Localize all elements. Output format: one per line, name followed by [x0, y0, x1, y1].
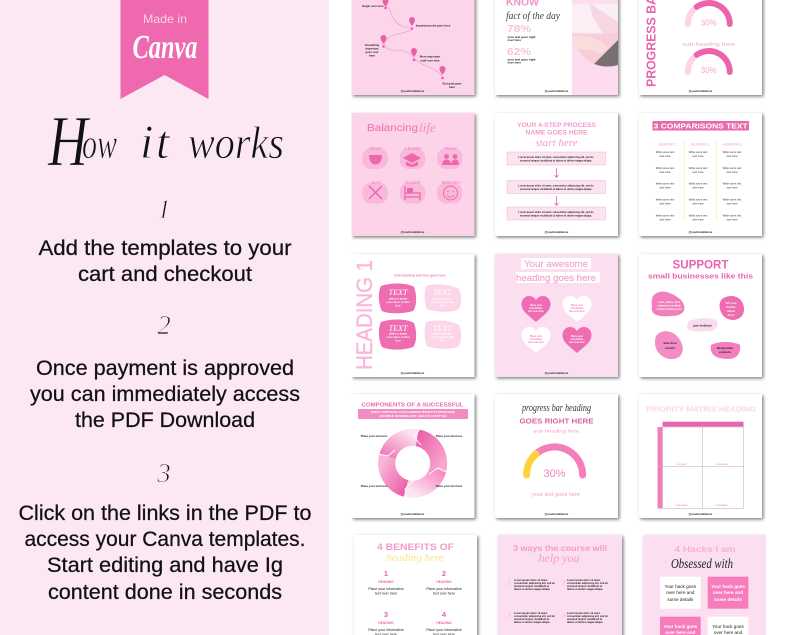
card: support small businesses [639, 254, 762, 377]
card: 4 hacks: over here and [714, 630, 743, 635]
card: 3 ways: consectetur adipiscing elit, sed do [514, 615, 555, 618]
card: heading 1: over here in this [386, 300, 410, 304]
card: 4 hacks: over here and [713, 590, 743, 595]
card: 4 benefits: Place your informative [426, 587, 462, 591]
step 3 text: content done in seconds [48, 580, 282, 604]
card: heading 1 [352, 254, 474, 377]
card: support small businesses: SUPPORT [672, 260, 728, 272]
card: roadmap [352, 0, 474, 95]
card: priority matrix: PRIORITY MATRIX HEADING [646, 404, 756, 414]
card: 4-step process: Lorem ipsum dolor sit amet, consectetur adipiscing elit, sed do [518, 184, 594, 188]
card: 3 ways: eiusmod tempor incididunt ut [567, 585, 602, 588]
card: 3 comparisons: over here [659, 170, 671, 174]
card: heading 1: place a point [389, 296, 407, 300]
card: 4 benefits [354, 535, 477, 635]
title: how it works: it [140, 116, 171, 169]
card: 3 comparisons: over here [726, 170, 738, 174]
card: progress bar heading: 30% [543, 468, 566, 480]
card: roadmap: Something [365, 43, 380, 47]
title: how it works: H [47, 101, 91, 181]
card: support small businesses: products [719, 350, 731, 354]
card: heading 1: over here in this [431, 335, 454, 339]
card: 3 ways: labore et dolore magna aliqua. [514, 588, 550, 591]
card: balancing life: SLEEP [405, 180, 421, 186]
gauge 2 [688, 51, 730, 72]
step 1 text: cart and checkout [78, 262, 252, 286]
card: hearts: informative [530, 338, 543, 341]
card: hearts: Place your [571, 304, 583, 307]
card: balancing life: Balancing [367, 122, 418, 134]
matrix [658, 422, 744, 508]
card: roadmap: Begin over here [362, 4, 384, 8]
card: support small businesses: about [727, 309, 735, 313]
card: balancing life [352, 113, 474, 236]
card: 3 ways: Lorem ipsum dolor sit amet, [514, 579, 548, 582]
card: 4 hacks: Your hack goes [665, 584, 697, 589]
card: hearts: Your awesome [524, 259, 588, 270]
card: support small businesses: friends [726, 305, 736, 309]
card: support small businesses: give feedback [693, 324, 712, 328]
card: 3 comparisons: Write some text [656, 198, 675, 202]
card: 4-step process: start here [535, 137, 578, 149]
matrix: SCHEDULE [716, 464, 728, 466]
card: 4 benefits: Place your informative [368, 587, 404, 591]
card: hearts: informative [530, 307, 543, 310]
card: hearts: heading goes here [516, 273, 596, 284]
card: 3 comparisons: over here [726, 154, 738, 158]
card: 3 ways: 3 [507, 613, 511, 620]
card: priority matrix: @yourhandlehere [689, 512, 713, 516]
icons [369, 153, 459, 200]
card: 4 benefits: HEADING [436, 580, 452, 584]
card: 4-step process: NAME GOES HERE [526, 130, 588, 136]
card: 3 comparisons: HEADING 3 [723, 142, 742, 146]
card: balancing life: @yourhandlehere [401, 230, 425, 234]
card: hearts [495, 254, 618, 377]
card: fact of the day: 78% [507, 23, 532, 35]
card: hearts: Place your [530, 304, 542, 307]
card: roadmap: important [366, 46, 379, 50]
card: 3 comparisons: over here [659, 154, 671, 158]
card: heading 1: place a point [433, 332, 452, 336]
step 3 number: 3 [156, 458, 171, 488]
card: 3 comparisons: HEADING 2 [691, 142, 709, 146]
card: 3 comparisons: Write some text [723, 150, 742, 154]
badge: made in Canva ribbon [120, 0, 208, 99]
card: 3 ways: labore et dolore magna aliqua. [514, 621, 550, 624]
card: 4 hacks: some details [714, 597, 742, 602]
card: 4 hacks: some details [667, 597, 694, 602]
card: 3 ways: consectetur adipiscing elit, sed do [567, 582, 608, 585]
card: progress bar heading: progress bar heading [521, 403, 591, 414]
card: 4 benefits: 3 [384, 610, 388, 619]
card: fact of the day: fact of the day [506, 11, 560, 22]
card: 3 comparisons: HEADING 1 [658, 142, 677, 146]
card: 3 comparisons: Write some text [656, 166, 675, 170]
card: 3 comparisons: over here [726, 186, 738, 190]
card: heading 1: TEXT [389, 324, 408, 333]
card: priority matrix [639, 394, 762, 518]
card: support small businesses: them [728, 313, 735, 317]
card: progress bar heading: your text goes here [532, 492, 580, 498]
card: 3 ways: 3 ways the course will [513, 543, 607, 553]
card: 4 hacks: Your hack goes [711, 584, 745, 589]
card: 3 comparisons: Write some text [656, 182, 675, 186]
card: progress bars: sub-heading here [682, 42, 735, 48]
card: fact of the day [495, 0, 618, 95]
gauge 1 [688, 3, 730, 24]
card: progress bars [639, 0, 762, 95]
template gallery [352, 0, 766, 635]
card: progress bar heading: @yourhandlehere [545, 512, 569, 516]
badge: made in Canva ribbon: Canva [132, 29, 198, 66]
card: heading 1: HEADING 1 [352, 260, 377, 370]
card: 3 ways: eiusmod tempor incididunt ut [514, 618, 549, 621]
card: components ring: @yourhandlehere [401, 512, 425, 516]
card: heading 1: over here in this [386, 335, 410, 339]
card: 4 benefits: 1 [384, 569, 388, 578]
card: hearts: text over here [569, 310, 586, 313]
card: 3 ways: Lorem ipsum dolor sit amet, [514, 612, 548, 615]
card: progress bar heading [495, 394, 618, 518]
card: fact of the day: 62% [507, 46, 532, 58]
card: heading 1: box [440, 304, 445, 308]
card: 4-step process: eiusmod tempor incididunt ut labore et dolore magna aliqua. [520, 214, 592, 218]
card: roadmap: here [449, 85, 455, 89]
card: components ring: (EXAMPLE: BUSINESS, DIET, HEALTHY LIFESTYLE) [380, 414, 446, 418]
step 2 text: you can immediately access [30, 382, 300, 406]
card: hearts: text over here [569, 341, 586, 344]
card: support small businesses: small businesses like this [648, 272, 753, 280]
card: support small businesses: social media posts [656, 307, 682, 311]
card: heading 1: box [440, 338, 445, 342]
card: fact of the day: @yourhandlehere [545, 89, 569, 93]
step 3 text [18, 501, 312, 604]
card: 3 comparisons: 3 COMPARISONS TEXT [654, 122, 748, 131]
card: hearts: Place your [571, 335, 583, 338]
card: 3 comparisons: Write some text [689, 198, 708, 202]
step 1 number: 1 [157, 194, 171, 224]
card: hearts: text over here [528, 341, 545, 344]
card: components ring: INSERT SOMETHING YOUR AUDIENCE MIGHT'D TO KNOW HERE [371, 410, 455, 414]
card: 3 comparisons: over here [692, 154, 704, 158]
card: roadmap: Important point goes here [416, 24, 451, 28]
card: 3 comparisons: over here [692, 218, 704, 222]
card: heading 1: over here in this [431, 300, 454, 304]
card: progress bar heading: sub heading here [534, 428, 580, 434]
card: roadmap: goes over [365, 50, 380, 54]
card: 4 benefits: Place your informative [426, 628, 462, 632]
card: 3 comparisons: @yourhandlehere [689, 230, 713, 234]
card: 4 benefits: text over here [375, 592, 397, 596]
card: heading 1: place a point [433, 296, 452, 300]
card: components ring [352, 394, 474, 518]
card: 4-step process [495, 113, 618, 236]
card: 4 benefits: Place your informative [368, 628, 404, 632]
card: 4 benefits: HEADING [378, 621, 394, 625]
title: how it works: ow [82, 122, 117, 168]
card: heading 1: TEXT [389, 288, 408, 297]
card: 3 comparisons: over here [692, 170, 704, 174]
ring diagram [378, 429, 447, 498]
badge: made in Canva ribbon: Made in [143, 12, 187, 26]
card: balancing life: life [419, 120, 436, 135]
card: heading 1: box [395, 304, 401, 308]
hearts [522, 296, 592, 353]
card: progress bar heading: GOES RIGHT HERE [520, 416, 594, 426]
card: 3 ways: consectetur adipiscing elit, sed do [567, 615, 608, 618]
step 1 text: Add the templates to your [38, 236, 292, 260]
card: heading 1: TEXT [433, 288, 452, 297]
card: 3 comparisons: Write some text [689, 214, 708, 218]
card: heading 1: @yourhandlehere [401, 371, 425, 375]
step 2 text: the PDF Download [75, 408, 255, 432]
card: components ring: Place your text here [436, 484, 463, 488]
step 3 text: access your Canva templates. [24, 527, 306, 551]
card: 3 comparisons: over here [659, 202, 671, 206]
card: 3 comparisons: Write some text [689, 182, 708, 186]
card: 4 benefits: HEADING [436, 621, 452, 625]
card: 4-step process: eiusmod tempor incididunt ut labore et dolore magna aliqua. [520, 160, 592, 162]
card: 3 comparisons: over here [692, 202, 704, 206]
blobs [652, 292, 744, 359]
card: heading 1: TEXT [433, 324, 452, 333]
card: 3 ways: Lorem ipsum dolor sit amet, [567, 579, 601, 582]
card: components ring: COMPONENTS OF A SUCCESSFUL [362, 402, 464, 408]
panel: how it works [0, 0, 329, 635]
card: 3 ways: 4 [562, 613, 566, 620]
matrix: DELEGATE [676, 504, 688, 507]
card: support small businesses: content [665, 346, 675, 350]
matrix: DO FIRST [677, 464, 688, 466]
matrix: ELIMINATE [716, 504, 728, 507]
step 2 text [30, 356, 300, 432]
gauge [527, 447, 583, 475]
card: progress bars: 30% [701, 18, 717, 28]
card: fact of the day: your text goes right [508, 35, 536, 39]
card: 4-step process: Lorem ipsum dolor sit amet, consectetur adipiscing elit, sed do [518, 211, 594, 214]
card: 3 comparisons: Write some text [656, 214, 675, 218]
card: 3 comparisons: over here [659, 218, 671, 222]
card: 4 hacks [643, 535, 766, 635]
card: balancing life: BREATH [441, 180, 461, 186]
card: progress bars: 30% [701, 66, 717, 75]
card: roadmap: More important [420, 54, 440, 58]
card: 3 comparisons: over here [659, 186, 671, 190]
card: 3 comparisons: Write some text [689, 166, 708, 170]
card: fact of the day: over here [508, 38, 521, 42]
card: 4 hacks: over here and [666, 590, 695, 595]
step 3 text: Start editing and have Ig [47, 553, 283, 577]
card: balancing life: REST [370, 146, 382, 152]
card: heading 1: box [395, 338, 401, 342]
card: 3 ways: Lorem ipsum dolor sit amet, [567, 612, 601, 615]
card: 3 comparisons: Write some text [656, 150, 675, 154]
card: 3 ways: eiusmod tempor incididunt ut [567, 618, 602, 621]
card: hearts: Place your [530, 335, 542, 338]
card: 3 comparisons: Write some text [723, 182, 742, 186]
title: how it works: works [188, 117, 284, 168]
card: components ring: Place your text here [436, 434, 463, 438]
card: roadmap: End goal goes [442, 82, 462, 86]
card: 4-step process: eiusmod tempor incididunt ut labore et dolore magna aliqua. [520, 188, 592, 191]
card: balancing life: LEARN [405, 146, 422, 152]
card: roadmap: here [369, 54, 375, 58]
card: 4 hacks: Obsessed with [671, 557, 733, 572]
card: 3 comparisons: over here [692, 186, 704, 190]
card: 4-step process: @yourhandlehere [545, 230, 569, 234]
card: 4-step process: Lorem ipsum dolor sit amet, consectetur adipiscing elit, sed do [518, 156, 594, 159]
card: 3 ways: consectetur adipiscing elit, sed do [514, 582, 555, 585]
step 2 text: Once payment is approved [36, 356, 294, 380]
card: heading 1: place a point [389, 332, 407, 336]
card: hearts: informative [571, 307, 584, 310]
card: 3 ways: help you [538, 551, 580, 565]
card: roadmap: stuff over here [420, 58, 440, 62]
card: balancing life: PLAY [445, 146, 458, 152]
step 1 text [38, 236, 292, 286]
card: 4 benefits: heading here [386, 552, 444, 564]
card: 4 hacks: over here and [665, 630, 696, 635]
card: 3 comparisons [639, 113, 762, 236]
step 2 number: 2 [157, 310, 171, 340]
card: 4 hacks: Your hack goes [712, 624, 744, 629]
card: fact of the day: your text goes right [508, 58, 536, 62]
card: 3 comparisons: Write some text [723, 198, 742, 202]
arrows [554, 168, 558, 206]
card: 4 benefits: 2 [442, 569, 446, 578]
card: support small businesses: Tell your [725, 301, 738, 305]
card: 4 benefits: 4 [442, 610, 447, 619]
card: support small businesses: comment on their [657, 304, 682, 308]
card: hearts: informative [571, 338, 584, 341]
card: 3 ways: labore et dolore magna aliqua. [567, 588, 603, 591]
card: 3 ways: 1 [507, 580, 511, 587]
card: fact of the day: over here [508, 60, 521, 64]
card: support small businesses: Save their [663, 341, 678, 345]
card: 4 benefits: text over here [433, 592, 455, 596]
step 3 text: Click on the links in the PDF to [18, 501, 312, 525]
card: roadmap: @yourhandlehere [401, 89, 425, 93]
card: 4-step process: YOUR 4-STEP PROCESS [517, 122, 596, 129]
card: 4 benefits: HEADING [378, 580, 394, 584]
card: 3 comparisons: over here [726, 218, 738, 222]
card: support small businesses: Review their [717, 346, 734, 350]
card: 3 ways: labore et dolore magna aliqua. [567, 621, 603, 624]
card: hearts: @yourhandlehere [545, 371, 569, 375]
card: 3 comparisons: over here [726, 202, 738, 206]
card: progress bars: @yourhandlehere [689, 89, 713, 93]
card: 3 comparisons: Write some text [689, 150, 708, 154]
card: 3 ways: eiusmod tempor incididunt ut [514, 585, 549, 588]
card: 3 ways [498, 535, 622, 635]
card: components ring: Place your text here [361, 434, 388, 438]
card: balancing life: EAT [372, 180, 381, 186]
card: 4 hacks: Your hack goes [663, 624, 698, 629]
photo: hands on laptop [572, 4, 618, 68]
card: 4 benefits: 4 BENEFITS OF [377, 542, 454, 552]
card: hearts: text over here [528, 310, 545, 313]
card: heading 1: Sub-heading and text goes here [394, 274, 446, 278]
card: 3 ways: 2 [561, 580, 566, 587]
card: 4 hacks: 4 Hacks I am [674, 544, 736, 554]
card: components ring: Place your text here [361, 484, 388, 488]
card: 3 comparisons: Write some text [723, 166, 742, 170]
card: support small businesses: Like, share, and [658, 300, 680, 304]
card: 3 comparisons: Write some text [723, 214, 742, 218]
